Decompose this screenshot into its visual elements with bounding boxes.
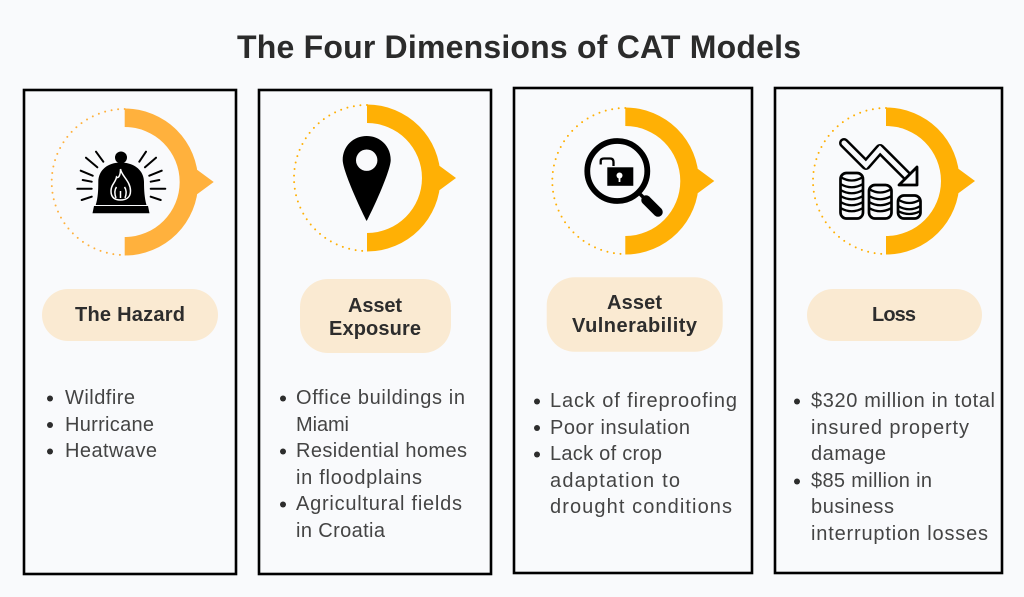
icon: map pin bbox=[343, 136, 391, 221]
list: exposure: Miami bbox=[296, 414, 349, 436]
list: loss: $320 million in total bbox=[811, 390, 995, 412]
list: hazards bbox=[47, 387, 157, 462]
list: exposure: in Croatia bbox=[296, 520, 386, 542]
list: loss: insured property bbox=[811, 417, 969, 439]
icon: magnifier over open lock bbox=[587, 141, 658, 212]
list: loss bbox=[794, 390, 995, 545]
pill heading: Asset Vulnerability: Asset bbox=[607, 292, 662, 314]
icon: alarm bell with flame bbox=[77, 152, 165, 213]
list: vulnerability: drought conditions bbox=[550, 496, 732, 518]
list: loss: damage bbox=[811, 443, 886, 465]
pill heading: Asset Exposure bbox=[300, 279, 451, 353]
list: exposure: in floodplains bbox=[296, 467, 422, 489]
pill heading: Asset Exposure: Exposure bbox=[329, 318, 421, 340]
pill heading: Asset Exposure: Asset bbox=[348, 295, 402, 317]
list: exposure: Residential homes bbox=[296, 440, 467, 462]
list: exposure: Agricultural fields bbox=[296, 493, 462, 515]
panel: Asset Exposure bbox=[259, 90, 491, 574]
gauge ring: hazard bbox=[52, 108, 214, 256]
pill heading: Asset Vulnerability: Vulnerability bbox=[572, 315, 698, 337]
list: vulnerability: adaptation to bbox=[550, 470, 680, 492]
list: vulnerability: Poor insulation bbox=[550, 417, 690, 439]
panel: Loss bbox=[775, 88, 1002, 573]
list: exposure: Office buildings in bbox=[296, 387, 465, 409]
pill heading: Loss bbox=[807, 289, 982, 341]
pill heading: Asset Vulnerability bbox=[547, 277, 723, 352]
list: hazards: Wildfire bbox=[65, 387, 135, 409]
pill heading: Loss: Loss bbox=[872, 304, 916, 326]
title: The Four Dimensions of CAT Models bbox=[237, 29, 801, 65]
list: exposure bbox=[280, 387, 467, 542]
list: vulnerability: Lack of crop bbox=[550, 443, 662, 465]
list: hazards: Heatwave bbox=[65, 440, 157, 462]
list: loss: interruption losses bbox=[811, 523, 988, 545]
gauge ring: loss bbox=[813, 108, 975, 254]
panel: The Hazard bbox=[24, 90, 236, 574]
list: hazards: Hurricane bbox=[65, 414, 154, 436]
list: vulnerability: Lack of fireproofing bbox=[550, 390, 737, 412]
pill heading: The Hazard: The Hazard bbox=[75, 304, 185, 326]
list: vulnerability bbox=[534, 390, 737, 518]
list: loss: business bbox=[811, 496, 894, 518]
pill heading: The Hazard bbox=[42, 289, 218, 341]
gauge ring: vulnerability bbox=[552, 108, 714, 254]
list: loss: $85 million in bbox=[811, 470, 932, 492]
panel: Asset Vulnerability bbox=[514, 88, 752, 573]
icon: falling arrow over coin stacks bbox=[840, 143, 920, 218]
gauge ring: exposure bbox=[294, 104, 456, 252]
